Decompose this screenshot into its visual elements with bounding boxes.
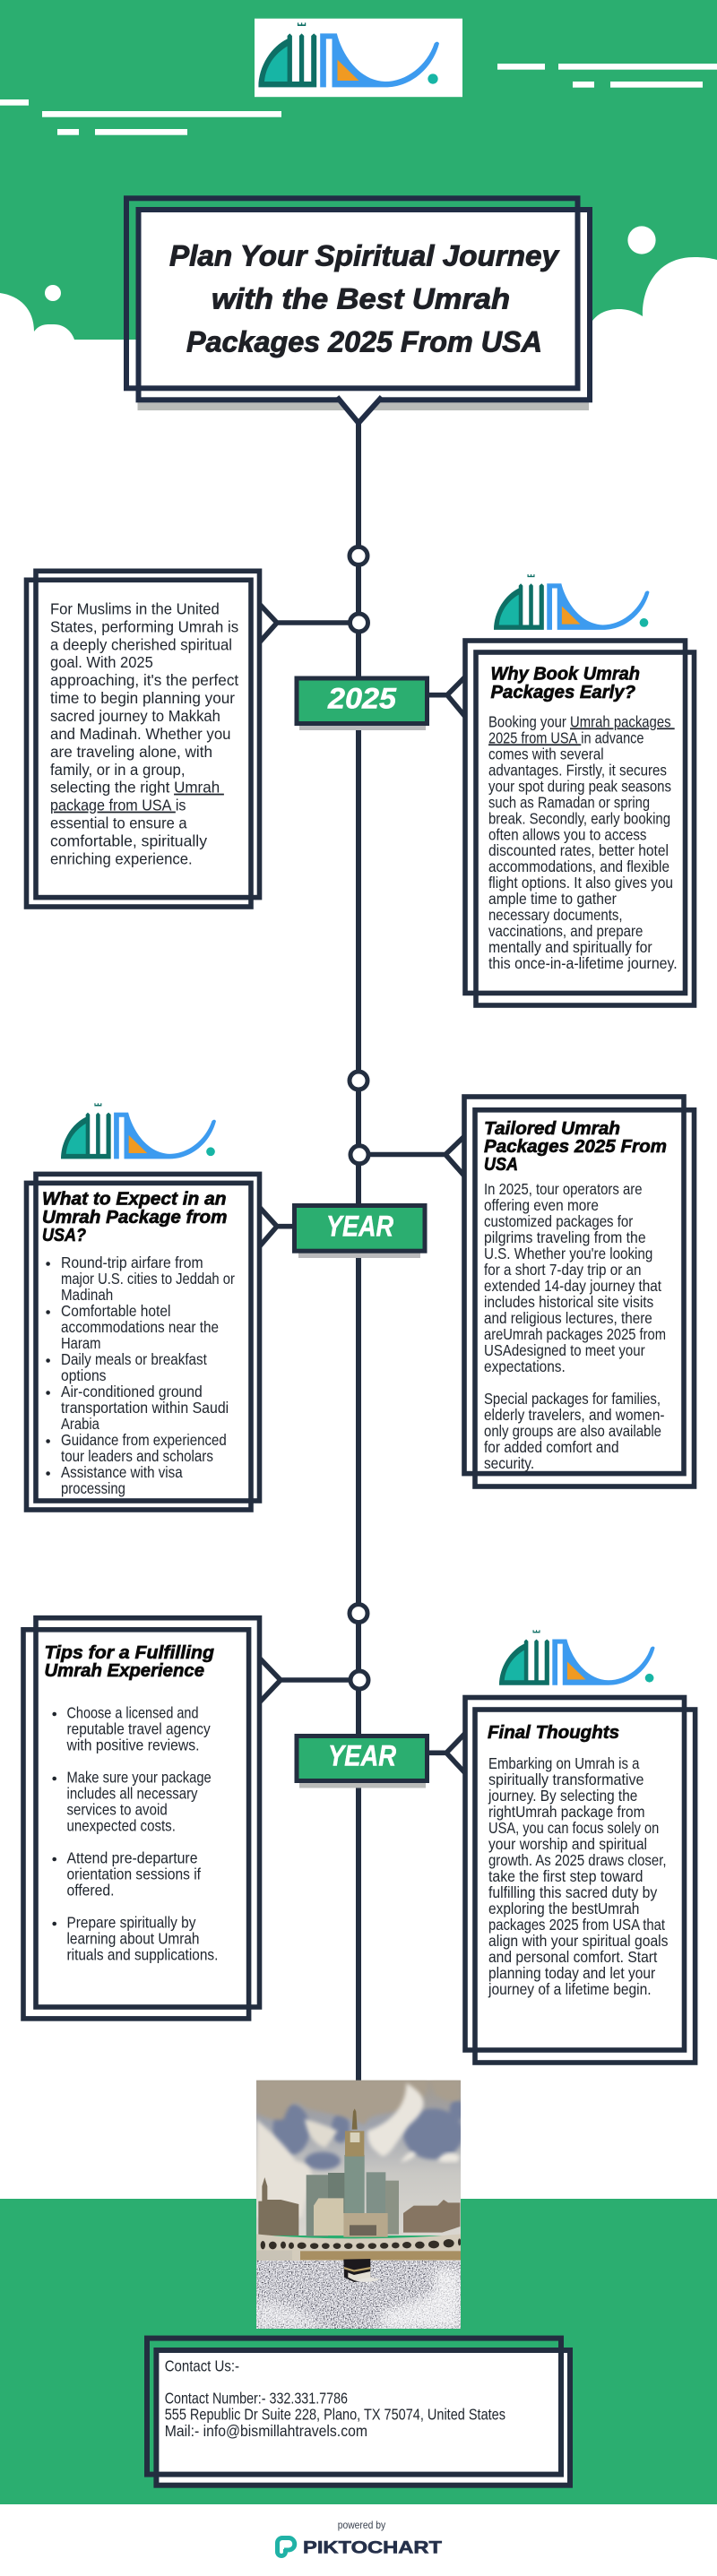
heading xyxy=(491,664,640,702)
timeline node with connector xyxy=(350,1146,368,1164)
heading: Umrah Package from xyxy=(42,1207,228,1228)
bullet list: learning about Umrah xyxy=(66,1929,199,1947)
body text: offering even more xyxy=(484,1196,599,1214)
intro text: essential to ensure a xyxy=(50,814,187,832)
panel: what to expect xyxy=(27,1174,292,1510)
badge shadow xyxy=(299,725,426,730)
logo header xyxy=(255,19,462,97)
title pointer xyxy=(337,396,382,423)
bullet list: Attend pre-departure xyxy=(66,1848,197,1866)
body text: spiritually transformative xyxy=(488,1770,644,1788)
bullet list: offered. xyxy=(66,1881,115,1899)
bullet list: includes all necessary xyxy=(66,1784,198,1802)
body text: journey of a lifetime begin. xyxy=(488,1980,652,1998)
title text: Plan Your Spiritual Journey xyxy=(169,240,560,272)
body text: discounted rates, better hotel xyxy=(488,841,669,859)
body text: Special packages for families, xyxy=(484,1390,661,1408)
heading xyxy=(42,1189,228,1245)
body text: expectations. xyxy=(484,1357,566,1375)
badge label: 2025 xyxy=(327,683,397,715)
right cloud xyxy=(592,257,717,342)
frames xyxy=(23,1618,260,2019)
bullet list: unexpected costs. xyxy=(66,1816,176,1834)
panel: intro xyxy=(27,571,350,907)
intro text xyxy=(50,599,238,867)
bubble right xyxy=(627,226,656,254)
connector xyxy=(369,1134,466,1178)
body text: advantages. Firstly, it secures xyxy=(488,761,667,779)
icon: piktochart mark xyxy=(278,2537,295,2555)
body text: USA, you can focus solely on xyxy=(488,1819,659,1837)
title back frame xyxy=(126,198,577,388)
bubble left xyxy=(45,285,61,301)
green footer band xyxy=(0,2199,717,2504)
intro text: selecting the right Umrah xyxy=(50,779,224,797)
bullet list: processing xyxy=(61,1479,125,1497)
frames xyxy=(465,641,694,1005)
connector xyxy=(429,1732,466,1774)
body text: includes historical site visits xyxy=(484,1293,654,1311)
contact back frame xyxy=(147,2339,561,2475)
contact text xyxy=(165,2356,505,2440)
bullet list: transportation within Saudi xyxy=(61,1399,229,1417)
bullet list: services to avoid xyxy=(66,1800,168,1818)
body text xyxy=(484,1180,666,1472)
photo: Makkah clock tower and Kaaba xyxy=(256,2081,464,2330)
body text: security. xyxy=(484,1454,534,1472)
body text: accommodations, and flexible xyxy=(488,857,669,875)
heading: Final Thoughts xyxy=(488,1722,619,1743)
intro text: For Muslims in the United xyxy=(50,599,220,617)
badge box xyxy=(294,1206,425,1251)
body text: planning today and let your xyxy=(488,1964,655,1982)
year badge 2025 xyxy=(297,678,427,730)
logo xyxy=(61,1103,216,1159)
timeline node with connector xyxy=(350,1671,368,1689)
bullet list: Prepare spiritually by xyxy=(66,1913,196,1931)
bullet list: Assistance with visa xyxy=(61,1463,183,1481)
heading: Tailored Umrah xyxy=(484,1118,620,1139)
bullet list: rituals and supplications. xyxy=(66,1945,218,1963)
title text xyxy=(169,240,560,358)
body text: ample time to gather xyxy=(488,890,617,908)
footer: powered by piktochart xyxy=(278,2519,442,2557)
bullet list: accommodations near the xyxy=(61,1318,219,1336)
heading xyxy=(484,1118,667,1175)
intro text: and Madinah. Whether you xyxy=(50,725,231,743)
body text: U.S. Whether you're looking xyxy=(484,1245,652,1262)
body text: break. Secondly, early booking xyxy=(488,809,670,827)
intro text: sacred journey to Makkah xyxy=(50,707,220,725)
heading: USA xyxy=(484,1154,518,1175)
connector xyxy=(259,604,350,643)
logo xyxy=(499,1630,655,1685)
intro text: time to begin planning your xyxy=(50,689,235,707)
contact text: Mail:- info@bismillahtravels.com xyxy=(165,2422,367,2440)
title text: Packages 2025 From USA xyxy=(186,326,542,358)
title text: with the Best Umrah xyxy=(212,282,510,314)
body text: rightUmrah package from xyxy=(488,1803,645,1821)
bullet list xyxy=(52,1703,218,1963)
piktochart wordmark: PIKTOCHART xyxy=(303,2538,442,2557)
intro text: family, or in a group, xyxy=(50,761,185,779)
bullet list: tour leaders and scholars xyxy=(61,1447,213,1465)
contact text: Contact Number:- 332.331.7786 xyxy=(165,2389,348,2407)
body text: mentally and spiritually for xyxy=(488,938,652,956)
bullet list: Round-trip airfare from xyxy=(61,1254,203,1271)
intro text: a deeply cherished spiritual xyxy=(50,635,232,653)
body text: necessary documents, xyxy=(488,906,622,924)
body text: comes with several xyxy=(488,745,604,762)
bullet list xyxy=(46,1254,235,1497)
body text: Embarking on Umrah is a xyxy=(488,1754,640,1772)
body text: and personal comfort. Start xyxy=(488,1948,657,1966)
contact text: 555 Republic Dr Suite 228, Plano, TX 75074, United States xyxy=(165,2405,505,2423)
bullet list: Guidance from experienced xyxy=(61,1431,227,1449)
heading: Umrah Experience xyxy=(45,1660,204,1681)
contact front frame xyxy=(156,2350,570,2486)
body text: vaccinations, and prepare xyxy=(488,922,643,940)
heading: Packages Early? xyxy=(491,682,635,702)
bullet list: Madinah xyxy=(61,1286,113,1304)
bullet list: options xyxy=(61,1366,107,1384)
connector xyxy=(259,1207,292,1247)
title shadow xyxy=(138,402,589,410)
intro text: approaching, it's the perfect xyxy=(50,671,238,689)
arcade xyxy=(256,2234,461,2262)
bullet list: orientation sessions if xyxy=(66,1865,201,1882)
bullet list: with positive reviews. xyxy=(66,1736,200,1753)
body text: your worship and spiritual xyxy=(488,1835,647,1853)
panel: why book early xyxy=(429,641,694,1005)
heading: Why Book Umrah xyxy=(491,664,640,685)
badge shadow xyxy=(299,1783,426,1788)
heading: Packages 2025 From xyxy=(484,1136,667,1157)
body text: USAdesigned to meet your xyxy=(484,1341,645,1359)
body text: journey. By selecting the xyxy=(488,1787,637,1805)
connector xyxy=(259,1658,350,1702)
bullet list: Choose a licensed and xyxy=(66,1703,199,1721)
intro text: package from USA is xyxy=(50,797,186,814)
intro text: enriching experience. xyxy=(50,849,193,867)
green header background xyxy=(0,0,717,340)
timeline node xyxy=(350,1605,367,1623)
left cloud xyxy=(0,293,74,342)
timeline node with connector xyxy=(350,614,367,632)
body text: packages 2025 from USA that xyxy=(488,1916,665,1934)
bullet list: Air-conditioned ground xyxy=(61,1383,203,1400)
year badge xyxy=(294,1206,425,1258)
title front frame xyxy=(138,210,590,400)
body text: only groups are also available xyxy=(484,1422,661,1440)
heading: USA? xyxy=(42,1225,86,1245)
body text: In 2025, tour operators are xyxy=(484,1180,642,1198)
year badge xyxy=(297,1736,427,1788)
body text: extended 14-day journey that xyxy=(484,1277,661,1295)
contact text: Contact Us:- xyxy=(165,2356,239,2374)
body text: 2025 from USA in advance xyxy=(488,728,644,746)
frames xyxy=(465,1697,695,2063)
body text: pilgrims traveling from the xyxy=(484,1228,646,1246)
body text: for a short 7-day trip or an xyxy=(484,1261,642,1279)
logo xyxy=(494,574,649,630)
body text: areUmrah packages 2025 from xyxy=(484,1325,666,1343)
body text: and religious lectures, there xyxy=(484,1309,652,1327)
badge box xyxy=(297,678,427,724)
intro text: are traveling alone, with xyxy=(50,743,212,761)
panel: tailored packages xyxy=(369,1097,694,1486)
bullet list: reputable travel agency xyxy=(66,1719,211,1737)
body text: fulfilling this sacred duty by xyxy=(488,1883,658,1901)
white dashes left xyxy=(0,99,281,135)
body text: Booking your Umrah packages xyxy=(488,712,675,730)
timeline spine xyxy=(356,421,361,2081)
badge shadow xyxy=(298,1253,420,1258)
badge box xyxy=(297,1736,427,1781)
badge label: YEAR xyxy=(326,1210,393,1243)
panel: final thoughts xyxy=(429,1697,695,2063)
frames xyxy=(464,1097,694,1486)
tower and buildings xyxy=(258,2108,460,2237)
bullet list: Arabia xyxy=(61,1415,99,1433)
panel: tips xyxy=(23,1618,350,2019)
body text: customized packages for xyxy=(484,1212,633,1230)
bullet list: Comfortable hotel xyxy=(61,1302,170,1320)
frames xyxy=(27,571,260,907)
timeline node xyxy=(350,1072,367,1090)
body text: flight options. It also gives you xyxy=(488,874,673,892)
body text: take the first step toward xyxy=(488,1867,643,1885)
intro text: comfortable, spiritually xyxy=(50,831,207,849)
body text: align with your spiritual goals xyxy=(488,1932,669,1950)
body text: for added comfort and xyxy=(484,1438,618,1456)
body text xyxy=(488,712,678,972)
body text: exploring the bestUmrah xyxy=(488,1900,639,1917)
heading: Tips for a Fulfilling xyxy=(45,1642,214,1663)
body text: often allows you to access xyxy=(488,825,647,843)
timeline node xyxy=(350,547,367,564)
body text: such as Ramadan or spring xyxy=(488,793,650,811)
heading: What to Expect in an xyxy=(42,1189,226,1210)
frames xyxy=(27,1174,260,1510)
heading xyxy=(45,1642,214,1681)
badge label: YEAR xyxy=(328,1740,396,1772)
intro text: States, performing Umrah is xyxy=(50,617,238,635)
bullet list: Haram xyxy=(61,1334,100,1352)
crowd xyxy=(256,2261,461,2330)
kaaba xyxy=(343,2259,380,2282)
connector xyxy=(429,676,466,718)
bullet list: Daily meals or breakfast xyxy=(61,1350,207,1368)
white dashes top right xyxy=(497,64,717,88)
title panel xyxy=(126,198,590,423)
bullet list: Make sure your package xyxy=(66,1768,212,1786)
body text: growth. As 2025 draws closer, xyxy=(488,1851,667,1869)
body text: elderly travelers, and women- xyxy=(484,1406,665,1424)
bullet list: major U.S. cities to Jeddah or xyxy=(61,1270,235,1288)
powered by: powered by xyxy=(338,2519,385,2531)
body text: your spot during peak seasons xyxy=(488,777,671,795)
body text: this once-in-a-lifetime journey. xyxy=(488,954,678,972)
body text xyxy=(488,1754,669,1998)
contact panel xyxy=(147,2339,570,2486)
intro text: goal. With 2025 xyxy=(50,653,153,671)
